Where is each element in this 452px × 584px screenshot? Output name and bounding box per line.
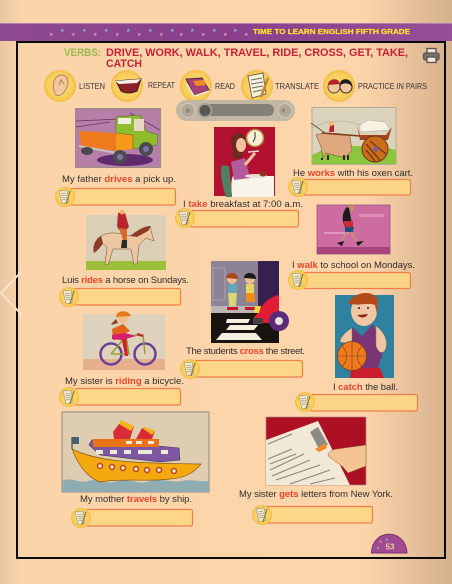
header band: ★ (137, 32, 142, 38)
label: listen: LISTEN (79, 82, 105, 91)
picture: truck (76, 108, 160, 168)
answer box (59, 387, 180, 407)
label: translate: TRANSLATE (275, 82, 319, 91)
picture: boy with basketball (335, 293, 394, 378)
picture: oxen cart (311, 108, 396, 164)
page number badge (372, 534, 407, 553)
header band: ★ (93, 32, 98, 38)
icon: practice in pairs (323, 70, 355, 102)
answer box (71, 508, 192, 528)
header band (0, 23, 452, 41)
header band: ★ (159, 32, 164, 38)
picture: letter in hand (266, 417, 366, 485)
audio player (176, 100, 295, 121)
sentence: Luis rides a horse on Sundays. (62, 275, 189, 286)
header band: ★ (71, 32, 76, 38)
header band: ★ (49, 32, 54, 38)
page number badge: 53 (386, 542, 395, 552)
answer box (288, 177, 410, 197)
label: practice in pairs: PRACTICE IN PAIRS (358, 82, 427, 91)
sentence: The students cross the street. (186, 346, 305, 357)
heading (64, 47, 408, 70)
icon: printer (424, 48, 439, 62)
label: read: READ (215, 82, 235, 91)
header band: ★ (170, 28, 175, 34)
heading: DRIVE, WORK, WALK, TRAVEL, RIDE, CROSS, GET, TAKE, (106, 47, 408, 59)
picture: ship (62, 412, 209, 492)
header band: ★ (201, 32, 206, 38)
sentence: He works with his oxen cart. (293, 168, 413, 179)
header band: ★ (179, 32, 184, 38)
heading: CATCH (106, 58, 142, 70)
picture: girl riding bicycle (83, 311, 165, 370)
answer box (175, 208, 298, 228)
picture: woman eating breakfast (214, 127, 275, 197)
icon: listen (44, 70, 76, 102)
header band: ★ (126, 28, 131, 34)
activity legend (44, 70, 427, 102)
sentence: My father drives a pick up. (62, 174, 176, 185)
icon: read (180, 70, 212, 102)
picture: students crossing the street (211, 261, 289, 343)
answer box (252, 505, 372, 525)
answer box (180, 359, 302, 379)
answer box (59, 287, 180, 307)
sentence: I take breakfast at 7:00 a.m. (183, 199, 303, 210)
page number badge: ★ (379, 539, 383, 544)
sentence: My mother travels by ship. (80, 494, 192, 505)
header band: ★ (190, 28, 195, 34)
icon: repeat (111, 70, 143, 102)
sentence: I walk to school on Mondays. (292, 260, 415, 271)
header band: ★ (212, 28, 217, 34)
picture: girl walking (317, 204, 390, 254)
header band: ★ (148, 28, 153, 34)
heading: VERBS: (64, 47, 101, 59)
header band: ★ (233, 28, 238, 34)
header band: ★ (60, 28, 65, 34)
header band: ★ (104, 28, 109, 34)
picture: horse rider (86, 210, 166, 270)
sentence: My sister is riding a bicycle. (65, 376, 184, 387)
header band: ★ (244, 32, 249, 38)
sentence: My sister gets letters from New York. (239, 489, 393, 500)
page number badge: ★ (385, 537, 389, 542)
label: repeat: REPEAT (148, 81, 175, 90)
header band: ★ (223, 32, 228, 38)
band title: TIME TO LEARN ENGLISH FIFTH GRADE (253, 29, 410, 36)
page number badge: ★ (376, 545, 380, 550)
answer box (295, 392, 418, 412)
answer box (55, 187, 176, 207)
sentence: I catch the ball. (333, 382, 398, 393)
left navigation arrow (1, 271, 22, 315)
answer box (288, 270, 410, 290)
header band: ★ (115, 32, 120, 38)
header band: ★ (82, 28, 87, 34)
icon: translate (241, 70, 273, 102)
